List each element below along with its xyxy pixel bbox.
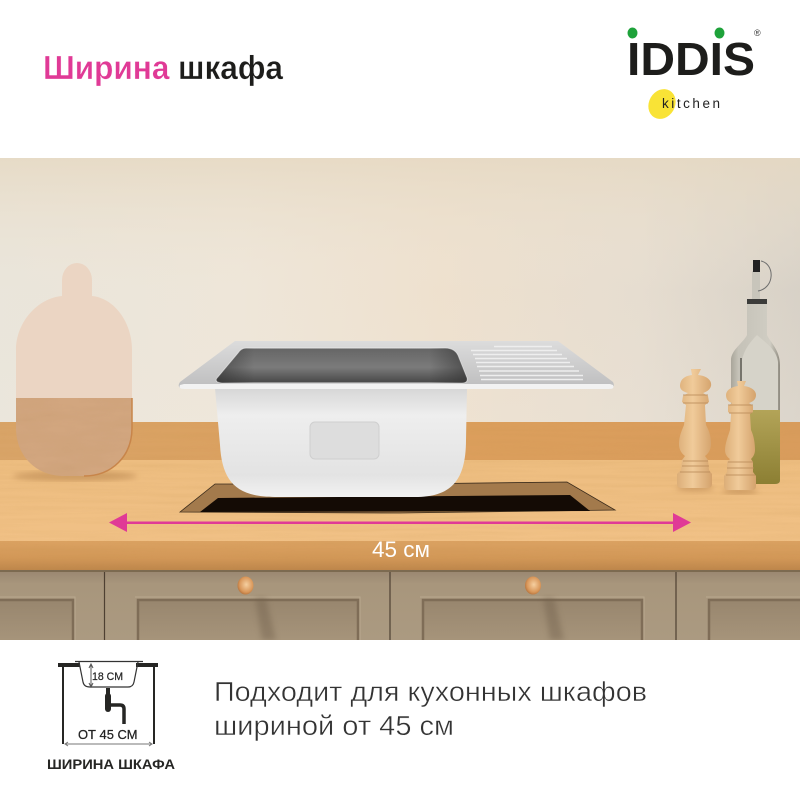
depth label: 18 СМ — [92, 671, 123, 683]
drainer ribs — [471, 346, 583, 380]
countertop — [0, 460, 800, 542]
registered mark: ® — [754, 28, 761, 38]
width label: ОТ 45 СМ — [78, 727, 138, 742]
sink label plate — [310, 422, 379, 459]
diagram caption: ШИРИНА ШКАФА — [47, 757, 175, 772]
cabinet doors — [0, 570, 800, 646]
sink bowl — [216, 348, 467, 383]
kitchen label: kitchen — [662, 96, 720, 111]
width arrow — [109, 513, 691, 532]
countertop lines — [58, 663, 158, 667]
wooden backsplash — [0, 422, 800, 461]
logo: iddis kitchen — [627, 28, 761, 124]
depth arrow — [89, 664, 93, 687]
wood grain texture — [0, 422, 800, 570]
countertop front edge — [0, 541, 800, 570]
drain siphon — [108, 688, 124, 724]
sink body — [215, 388, 467, 497]
sink — [179, 341, 614, 497]
description text: шириной от 45 см — [214, 710, 454, 741]
board shadow — [13, 471, 137, 481]
wall — [0, 158, 800, 422]
logo wordmark: IDDIS — [627, 33, 755, 85]
logo green dots — [628, 28, 724, 38]
sink bowl outline — [75, 662, 143, 687]
width arrow — [65, 742, 152, 746]
cabinet walls — [63, 666, 154, 744]
width value: 45 см — [372, 537, 430, 562]
oil bottle — [731, 260, 780, 484]
title: Ширина шкафа — [43, 49, 284, 86]
mill shadows — [676, 485, 758, 494]
door knobs — [238, 576, 541, 594]
kitchen photo panel — [0, 158, 800, 646]
cutting board — [16, 263, 134, 478]
yellow blob — [643, 84, 681, 124]
pepper mill small — [724, 381, 756, 490]
description text: Подходит для кухонных шкафов — [214, 676, 647, 707]
sink rim — [179, 341, 614, 389]
description text — [214, 676, 647, 741]
pepper mill large — [677, 369, 712, 488]
cutout hole — [180, 482, 615, 513]
cabinet width diagram — [47, 662, 175, 772]
